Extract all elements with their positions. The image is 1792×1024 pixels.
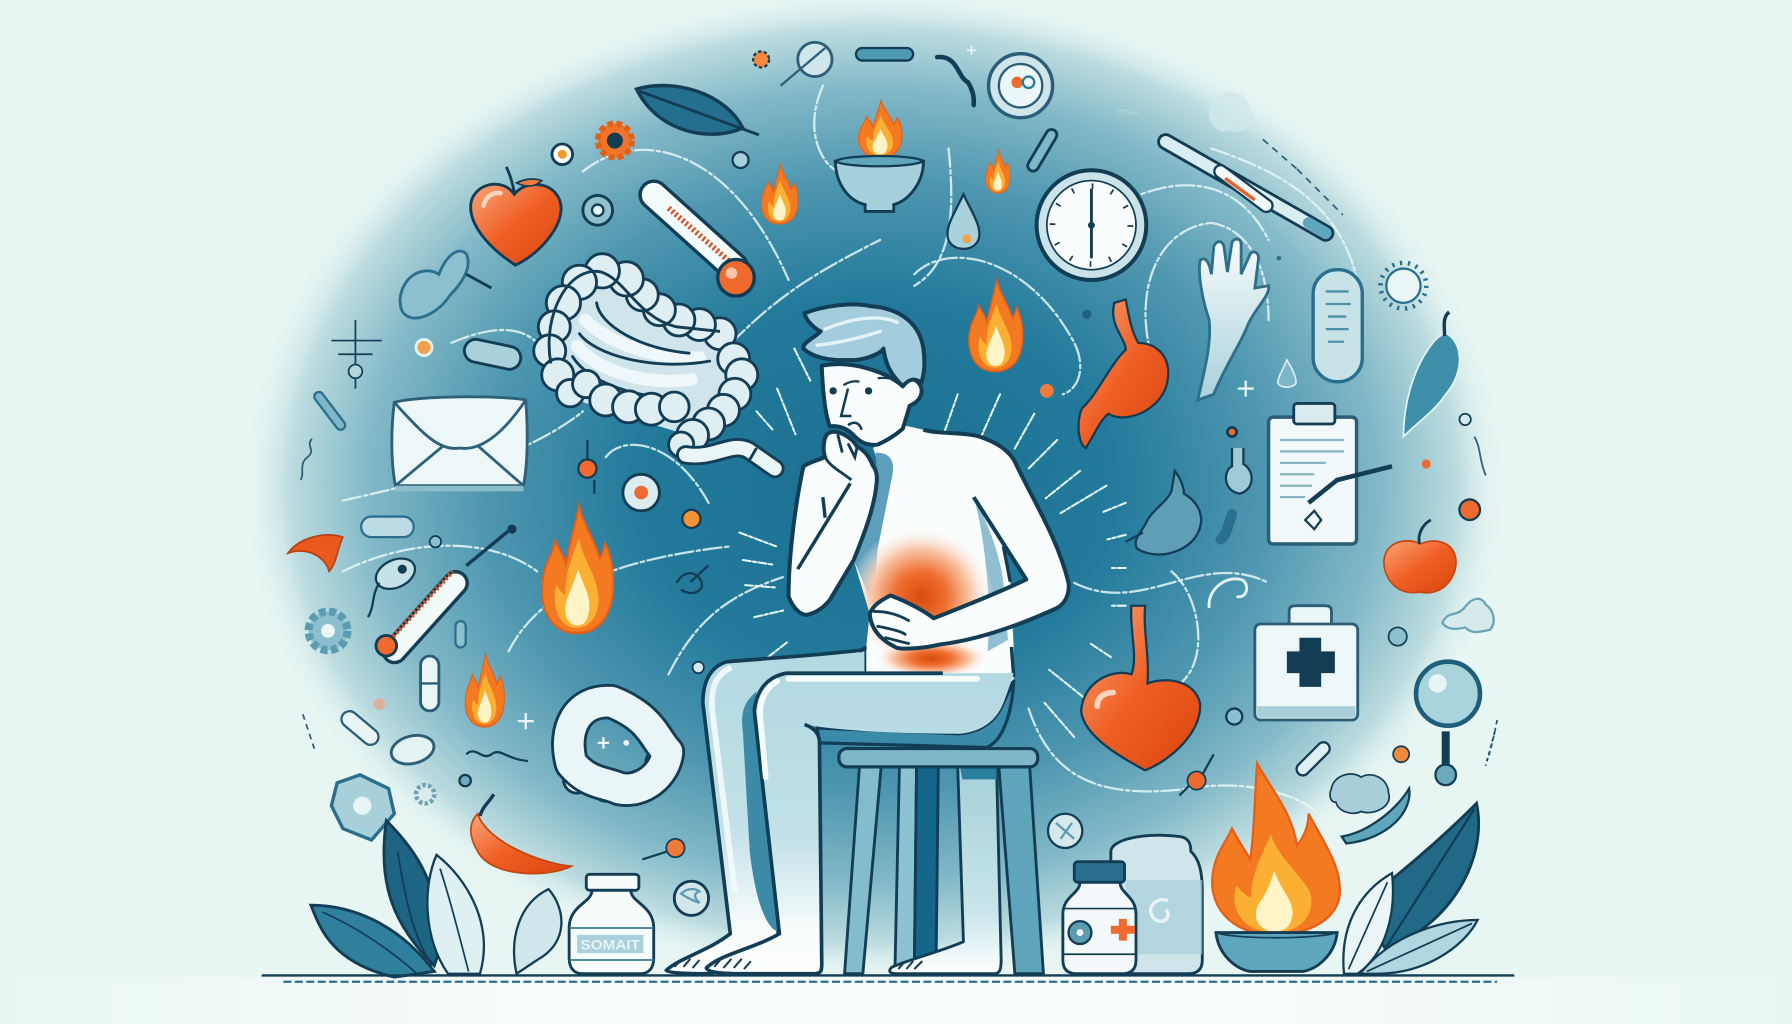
stomach redness (856, 533, 992, 674)
left arm and fist (789, 432, 877, 615)
icon: cell cluster (1442, 599, 1494, 632)
icon: magnifier (1416, 662, 1480, 785)
icon: ring organ (518, 702, 680, 802)
ground line (262, 975, 1514, 982)
icon: small pills left (338, 626, 461, 768)
torso (854, 425, 1014, 681)
icon: red apple right (1384, 520, 1456, 593)
icon: gear orange (552, 123, 632, 165)
icon: heart stomach (1081, 606, 1214, 795)
icon: pill top (1033, 135, 1051, 166)
icon: capsule tablet (1313, 270, 1362, 382)
icon: right bottom leaves (1343, 803, 1479, 974)
hair (803, 304, 924, 386)
icon: flame small lower left (465, 654, 504, 727)
intestine body (543, 265, 743, 434)
icon: large flame left (542, 505, 613, 633)
icon: caduceus (331, 320, 382, 389)
icon: gear lower left (309, 611, 347, 650)
icon: thermometer lower left (376, 525, 517, 667)
icon: small circle badge (674, 662, 747, 928)
intestine haustra (534, 254, 758, 457)
icon: thermometer upper right (1166, 142, 1326, 233)
icon: sun badge (1277, 256, 1426, 309)
icon: red apple heart (471, 167, 561, 265)
icon: medicine bottles (1063, 835, 1202, 974)
flowing dashed energy lines (343, 86, 1360, 823)
icon: squiggles left (459, 566, 709, 786)
icon: first aid kit (1255, 606, 1358, 720)
icon: leaf top (637, 85, 759, 135)
icon: worm curl (1209, 427, 1247, 608)
person seated (666, 304, 1069, 974)
icon: small red bead and microbe (578, 440, 701, 528)
icon: medium flame by head (969, 280, 1023, 371)
far shin and foot (890, 767, 1001, 974)
icon: clipboard (1269, 403, 1392, 544)
intestine folds (573, 303, 710, 397)
far leg (666, 649, 866, 974)
right arm and hand (870, 430, 1069, 649)
icon: red swoosh chili left (288, 535, 343, 571)
icon: molecule (331, 775, 434, 840)
icon: flask (1226, 360, 1296, 494)
icon: small tadpoles left (361, 517, 441, 617)
face features (843, 378, 897, 385)
icon: envelope (392, 397, 527, 491)
thigh underside shadow (817, 681, 1014, 747)
icon: small flame right top (986, 150, 1010, 193)
icon: bottom molecule badge (1048, 814, 1082, 848)
icon: orange chili bottom left (471, 794, 685, 874)
intestine tail (686, 448, 775, 469)
icon: left bottom leaves (311, 821, 561, 977)
icon: flame in bowl (1212, 763, 1340, 971)
icon: orange stomach chili (1079, 299, 1168, 448)
head (822, 364, 922, 445)
icon: thermometer upper left (634, 176, 754, 296)
icon: raised hand (1198, 239, 1269, 400)
icon: droplet (947, 194, 979, 249)
icon: small capsule left (319, 339, 432, 425)
decorative small icons: top row (753, 42, 1254, 132)
icon: intestine (534, 254, 775, 469)
icon: target ring (583, 152, 749, 225)
icon: pill left (462, 337, 523, 371)
icon: blue gut tadpole (400, 251, 491, 318)
icon: blue stomach organ right (1126, 471, 1232, 555)
icon: pill bottle SOMAT (569, 874, 654, 974)
small dots on right (1226, 414, 1480, 762)
bottle label text: SOMAIT (581, 938, 640, 954)
icon: clock (1037, 170, 1146, 280)
small dots near head (1040, 310, 1091, 398)
icon: capsule and blob right (1303, 731, 1495, 843)
stool seat (839, 749, 1038, 767)
icon: blue chili right (1403, 312, 1460, 437)
icon: bowl with flame (835, 101, 923, 211)
stool legs (845, 767, 1043, 974)
icon: small flame left top (761, 165, 798, 224)
edge dashes left and right (301, 139, 1497, 759)
near leg (706, 673, 1014, 974)
